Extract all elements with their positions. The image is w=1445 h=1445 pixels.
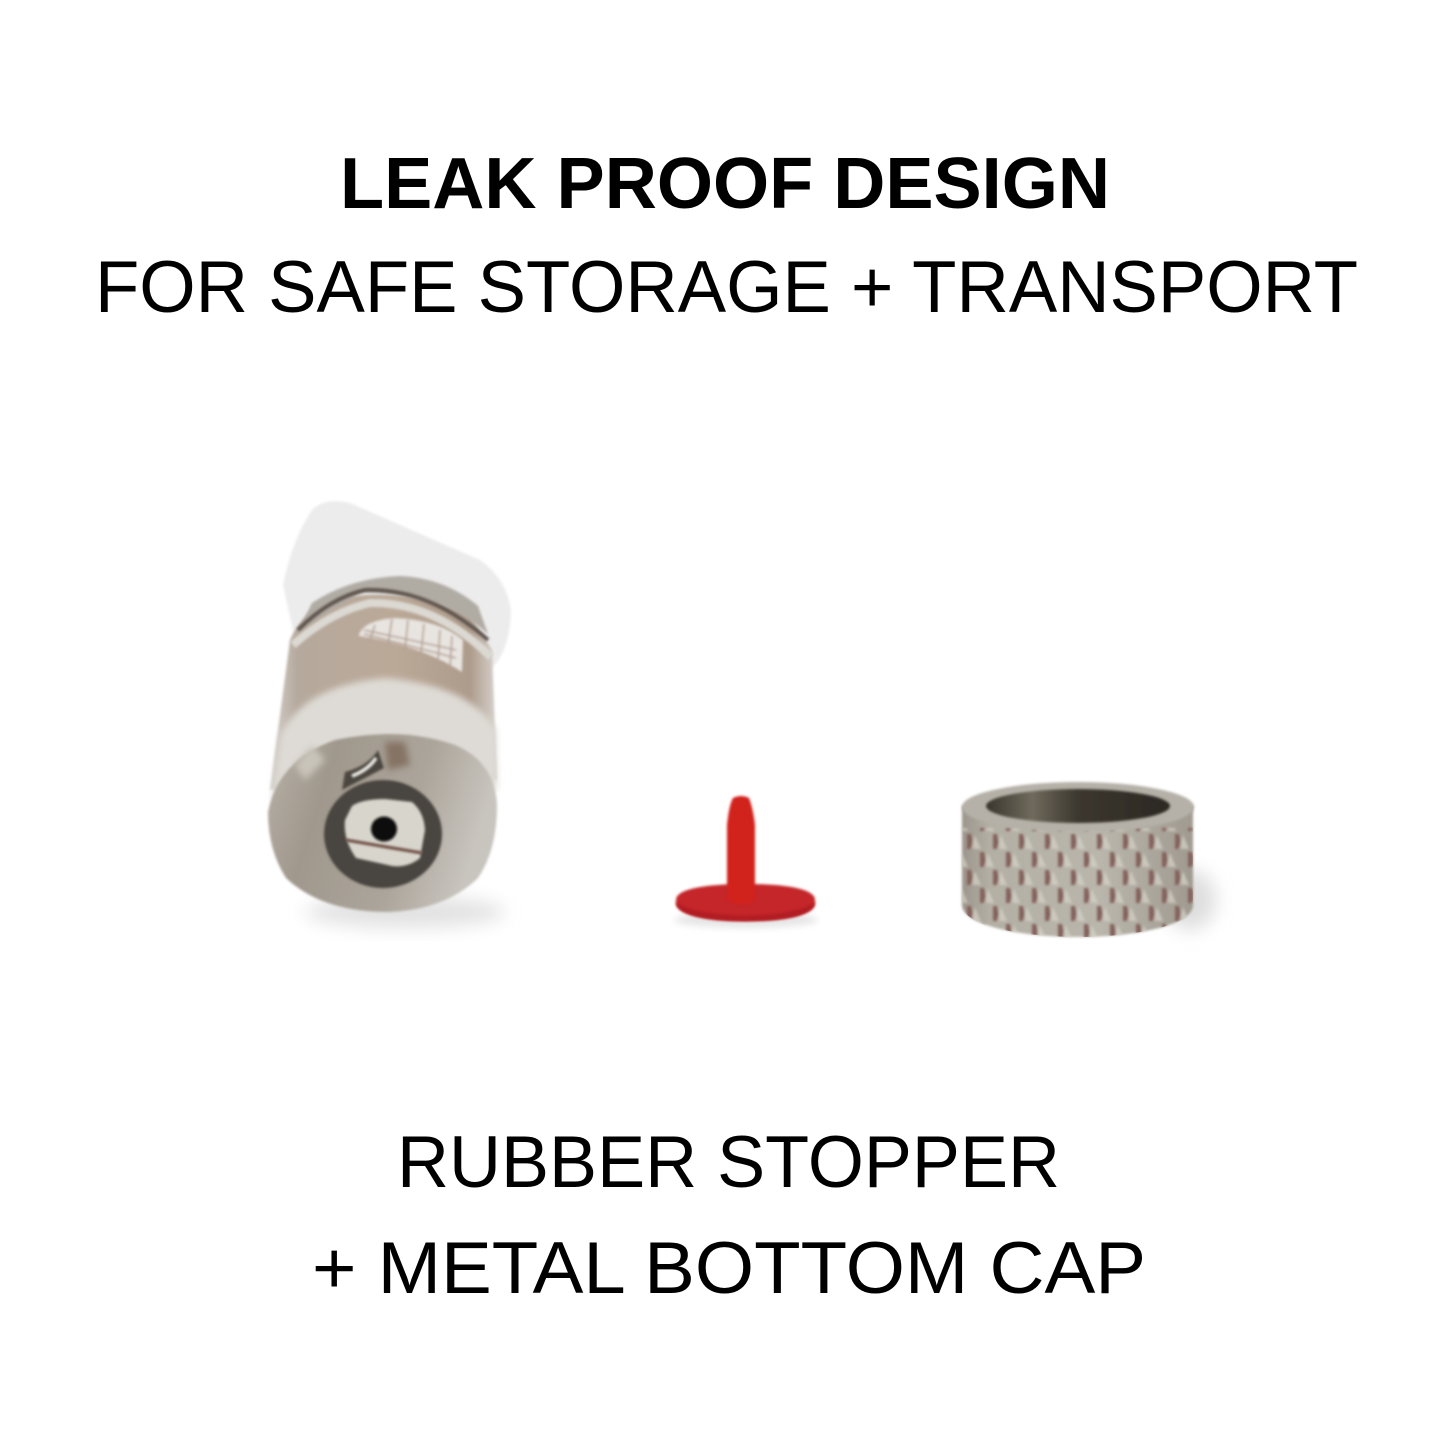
stopper shadow xyxy=(674,912,818,928)
stopper stem xyxy=(727,796,755,904)
metal base cap xyxy=(268,734,497,912)
transparent film tab xyxy=(283,501,511,668)
base highlights xyxy=(342,750,384,790)
subtitle: for safe storage + transport: FOR SAFE STORAGE + TRANSPORT xyxy=(95,247,1358,328)
printed mesh label xyxy=(359,618,463,672)
square connector insert xyxy=(345,799,425,866)
knurled texture xyxy=(962,828,1193,940)
glass cartridge body xyxy=(270,595,497,790)
photo: cartridge with film tab xyxy=(268,501,511,928)
white band xyxy=(272,678,497,800)
air hole xyxy=(371,816,397,842)
stopper disk xyxy=(676,884,815,921)
photo: knurled metal bottom cap xyxy=(962,782,1216,940)
title: leak proof design: LEAK PROOF DESIGN xyxy=(340,144,1110,224)
cap shadow xyxy=(1164,870,1216,930)
caption line 1: rubber stopper: RUBBER STOPPER xyxy=(397,1122,1060,1203)
metal neck band with ring xyxy=(300,576,488,634)
cap top rim xyxy=(962,782,1194,832)
cap inner opening xyxy=(986,789,1170,823)
shadow under cartridge xyxy=(305,896,505,928)
photo: red rubber stopper xyxy=(674,796,818,928)
caption line 2: metal bottom cap: + METAL BOTTOM CAP xyxy=(312,1228,1146,1309)
cap outer body xyxy=(962,806,1193,937)
center connector ring xyxy=(324,780,442,888)
